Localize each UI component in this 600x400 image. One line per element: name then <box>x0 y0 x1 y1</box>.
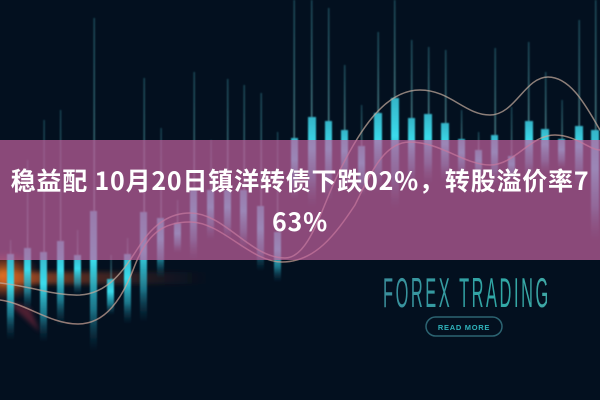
button: READ MORE: READ MORE <box>438 323 490 332</box>
title text <box>11 162 589 239</box>
button: READ MORE <box>426 317 502 336</box>
title text: 稳益配 10月20日镇洋转债下跌02%，转股溢价率7 <box>11 162 589 198</box>
translucent magenta title band <box>0 140 600 260</box>
trend curves <box>0 77 600 324</box>
heading: FOREX TRADING: FOREX TRADING <box>383 269 551 316</box>
candlestick bodies <box>7 98 599 351</box>
orange glow at left of chart <box>0 250 210 332</box>
candlestick wicks <box>10 0 596 281</box>
title text: 63% <box>272 203 328 239</box>
